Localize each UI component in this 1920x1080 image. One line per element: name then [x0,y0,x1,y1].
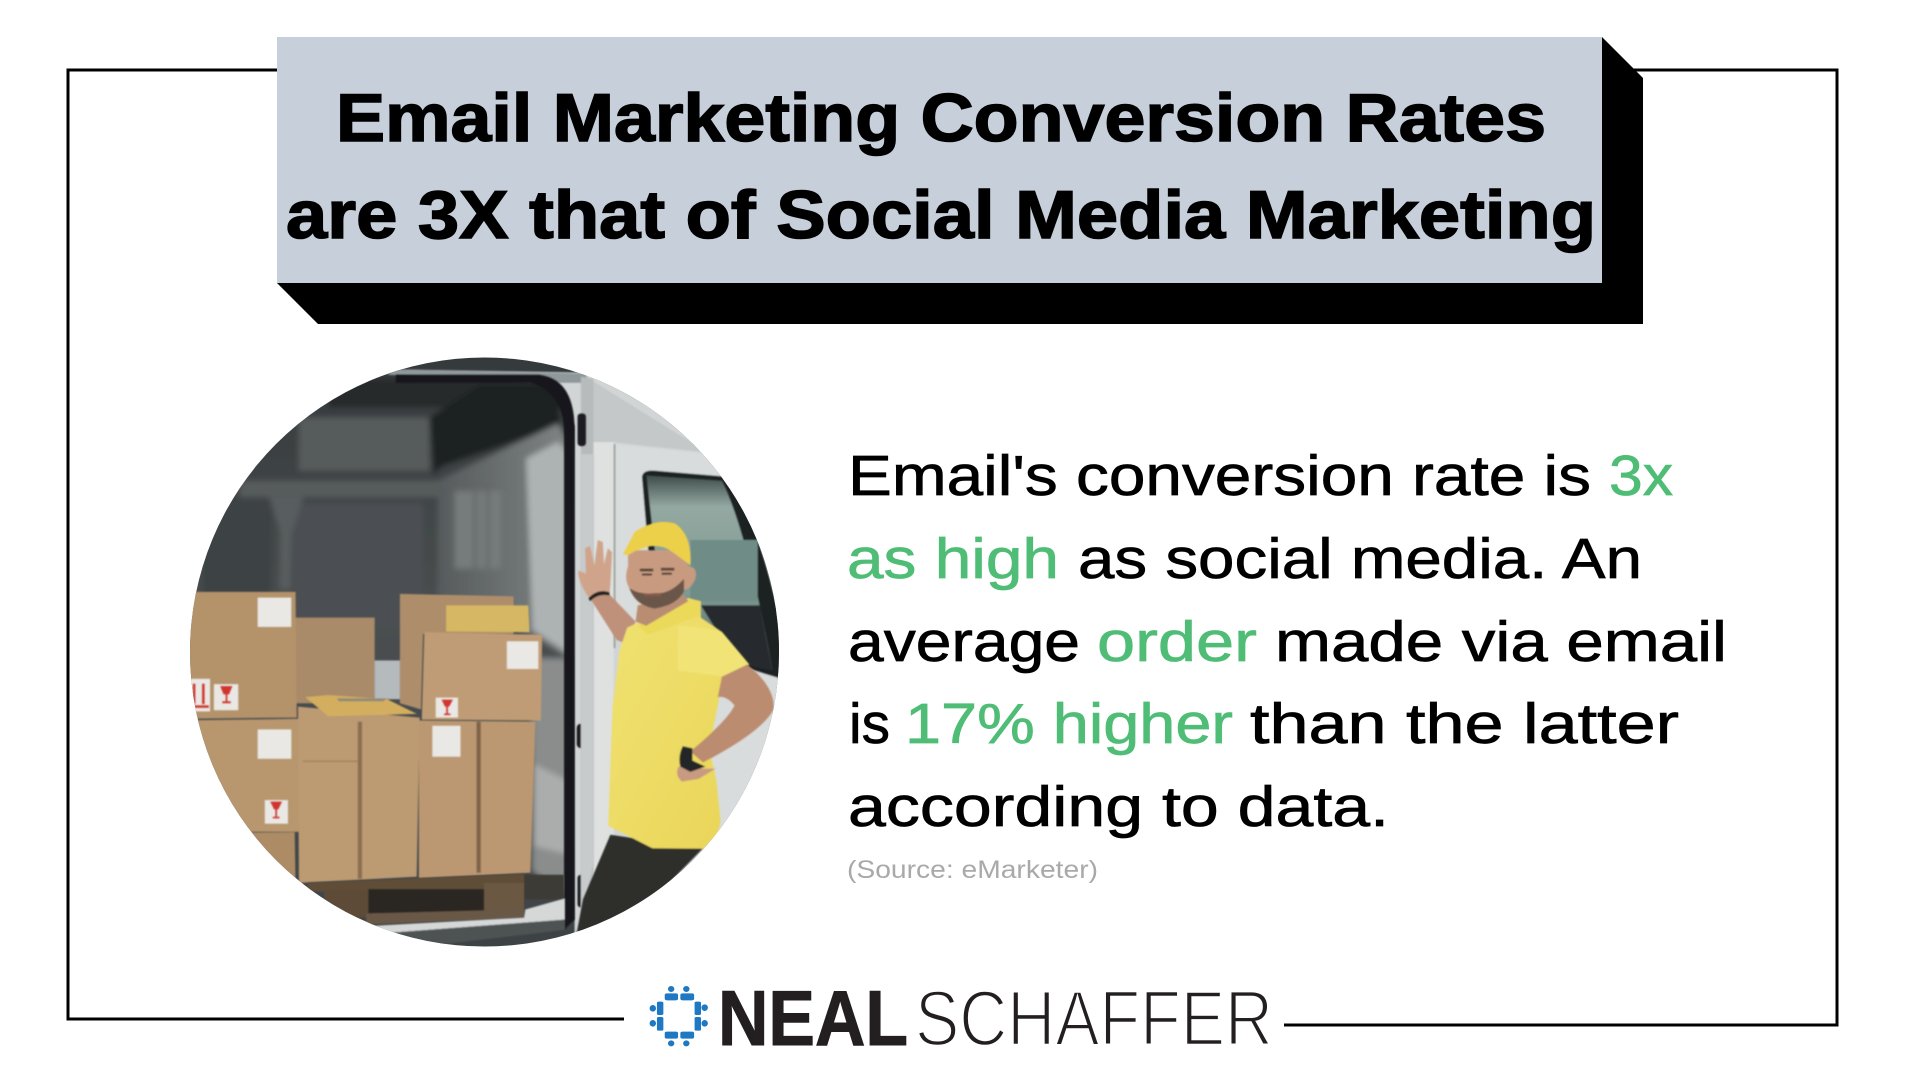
line 2 [847,527,1642,591]
raised arm and hand [589,593,636,644]
wooden pallet [307,874,564,925]
line 4: 17% higher [905,692,1233,756]
line 3: made via email [1275,610,1727,674]
line 3 [848,610,1727,674]
logo: Neal Schaffer [650,974,1273,1062]
photo: delivery man beside van [177,344,791,956]
banner title [286,80,1596,253]
line 3: order [1097,610,1257,674]
neck [636,595,688,626]
title banner [277,37,1643,324]
line 3: average [848,610,1080,674]
van interior [177,344,791,956]
cap [623,522,691,565]
van exterior and window [387,369,791,952]
line 2: as social media. An [1078,527,1642,591]
banner 3D shadow [277,37,1643,324]
bent arm [690,665,774,762]
line 5: according to data. [848,775,1389,839]
line 2: as high [847,527,1059,591]
line 4: is [849,692,890,756]
line 1: 3x [1609,444,1673,508]
line 1: Email's conversion rate is [848,444,1591,508]
banner title: are 3X that of Social Media Marketing [286,177,1596,253]
box labels [190,598,538,824]
logo word NEAL: NEAL [718,974,908,1062]
fragile stickers [193,684,453,818]
cardboard boxes [177,592,542,883]
door frame [396,375,615,930]
line 4: than the latter [1250,692,1679,756]
shirt [608,598,749,849]
trousers [576,834,703,932]
banner panel [277,37,1602,283]
head [626,550,696,609]
van floor [375,898,566,944]
delivery man [575,522,774,944]
body paragraph [847,444,1727,839]
logo word SCHAFFER: SCHAFFER [915,974,1273,1062]
source note: (Source: eMarketer) [847,856,1098,884]
banner title: Email Marketing Conversion Rates [336,80,1546,156]
logo icon: meeting table [650,986,708,1046]
line 4 [849,692,1679,756]
